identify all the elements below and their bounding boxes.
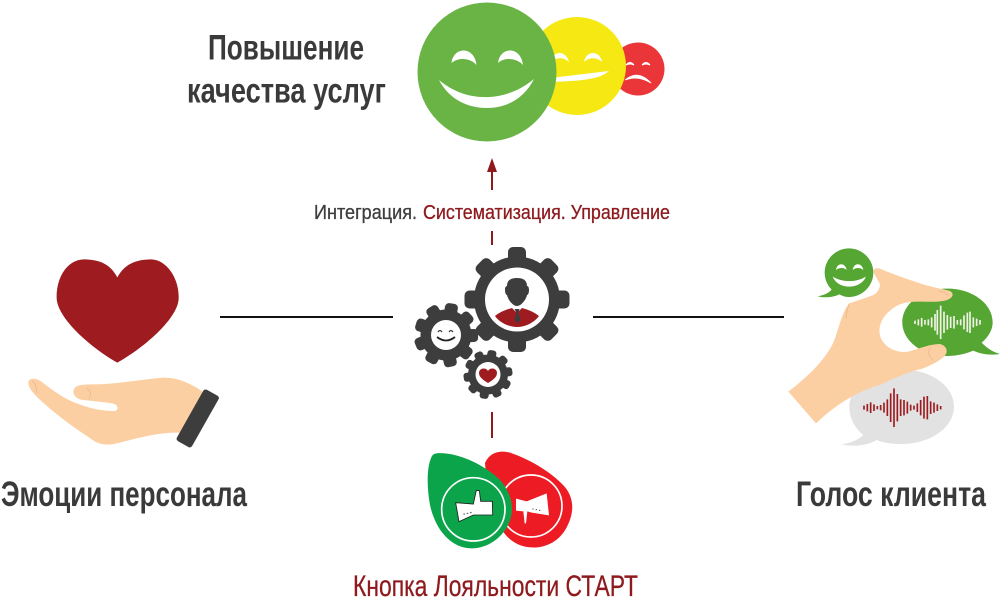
icon: green waveform bubble (902, 289, 1000, 356)
icon: green thumbs-up drop (428, 453, 512, 548)
connector: left line (220, 316, 393, 318)
icon: open hand (28, 378, 205, 445)
title: service quality improvement (187, 28, 386, 110)
title: service quality improvement: Повышение (208, 28, 364, 68)
icon: central gears (413, 247, 570, 399)
icon: green smiley bubble (818, 248, 873, 297)
icon: hand holding heart (28, 259, 219, 447)
icon: small gear with heart (463, 350, 513, 399)
icon: yellow neutral smiley (528, 17, 626, 115)
icon: shirt cuff (177, 389, 219, 447)
icon: large gear with person (464, 247, 570, 352)
title: service quality improvement: качества услуг (187, 72, 386, 110)
label: staff emotions: Эмоции персонала (1, 475, 247, 514)
icon: red thumbs-down drop (485, 452, 572, 548)
connector: right line (593, 316, 784, 318)
arrow: upward from gears to smileys (487, 158, 497, 245)
connector: bottom line (491, 412, 493, 438)
icon: heart (57, 259, 179, 363)
icon: hand holding speech bubbles (788, 248, 1000, 446)
icon: three smileys (418, 2, 664, 142)
icon: green happy smiley (418, 2, 556, 142)
icon: red sad smiley (612, 42, 664, 96)
text: integration, systematization, management: Интеграция. (314, 201, 417, 224)
text: integration, systematization, management: Систематизация. Управление (423, 201, 670, 224)
icon: hand creases (846, 291, 948, 360)
icon: loyalty button thumbs (428, 452, 572, 548)
icon: medium gear with smile (413, 303, 478, 368)
icon: hand pinching bubble (788, 268, 953, 423)
icon: grey speech bubble with waveform (842, 369, 954, 446)
icon: finger creases (32, 381, 91, 399)
text: integration, systematization, management (314, 201, 670, 224)
label: loyalty button START: Кнопка Лояльности СТАРТ (353, 570, 638, 603)
